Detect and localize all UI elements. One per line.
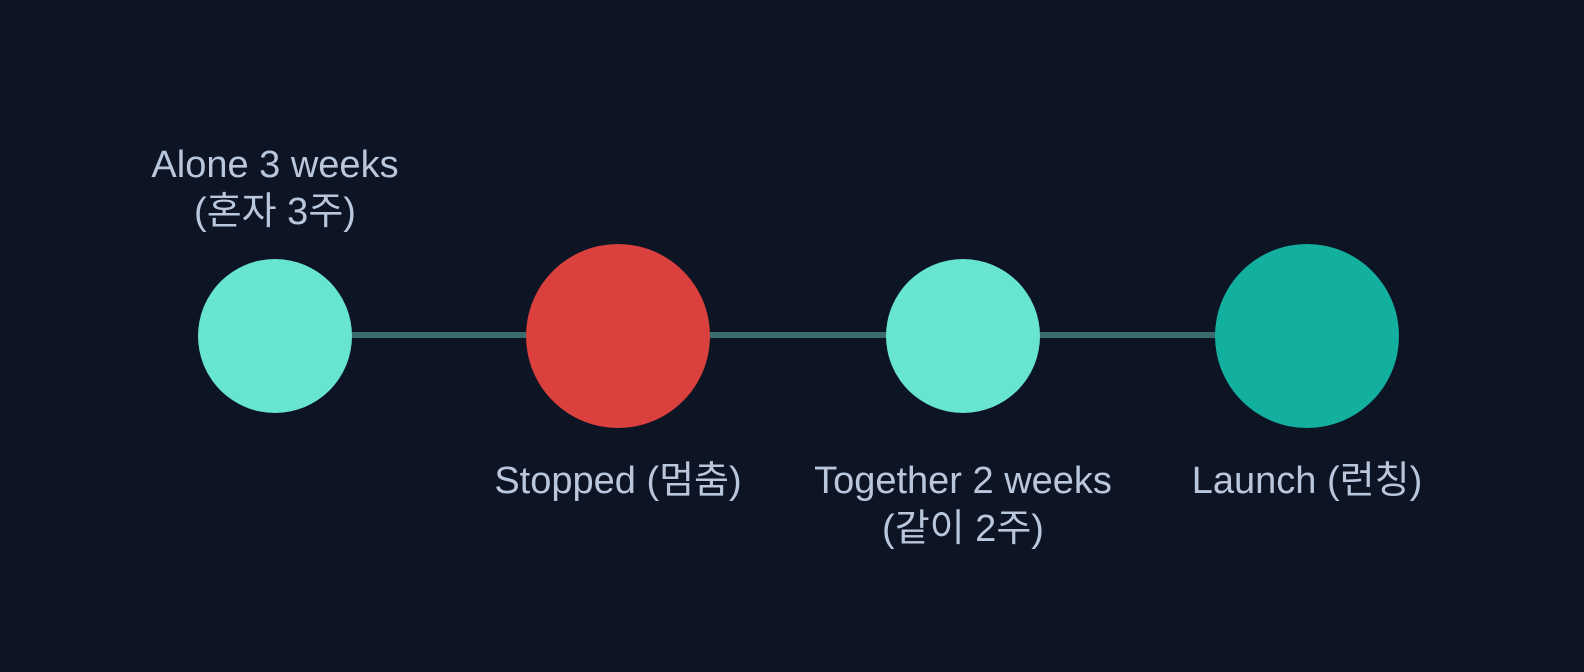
milestone: alone 3 weeks bbox=[151, 144, 399, 413]
milestone: launch bbox=[1192, 244, 1422, 502]
connector line bbox=[274, 332, 1307, 338]
milestone: alone 3 weeks: (혼자 3주) bbox=[194, 191, 356, 233]
milestone: together 2 weeks bbox=[814, 259, 1112, 550]
milestone: stopped bbox=[494, 244, 742, 502]
milestone: launch: Launch (런칭) bbox=[1192, 460, 1422, 502]
milestone: together 2 weeks: (같이 2주) bbox=[882, 508, 1044, 550]
milestone: together 2 weeks: Together 2 weeks bbox=[814, 460, 1112, 502]
milestone: stopped: Stopped (멈춤) bbox=[494, 460, 742, 502]
milestone: alone 3 weeks: Alone 3 weeks bbox=[151, 144, 399, 186]
